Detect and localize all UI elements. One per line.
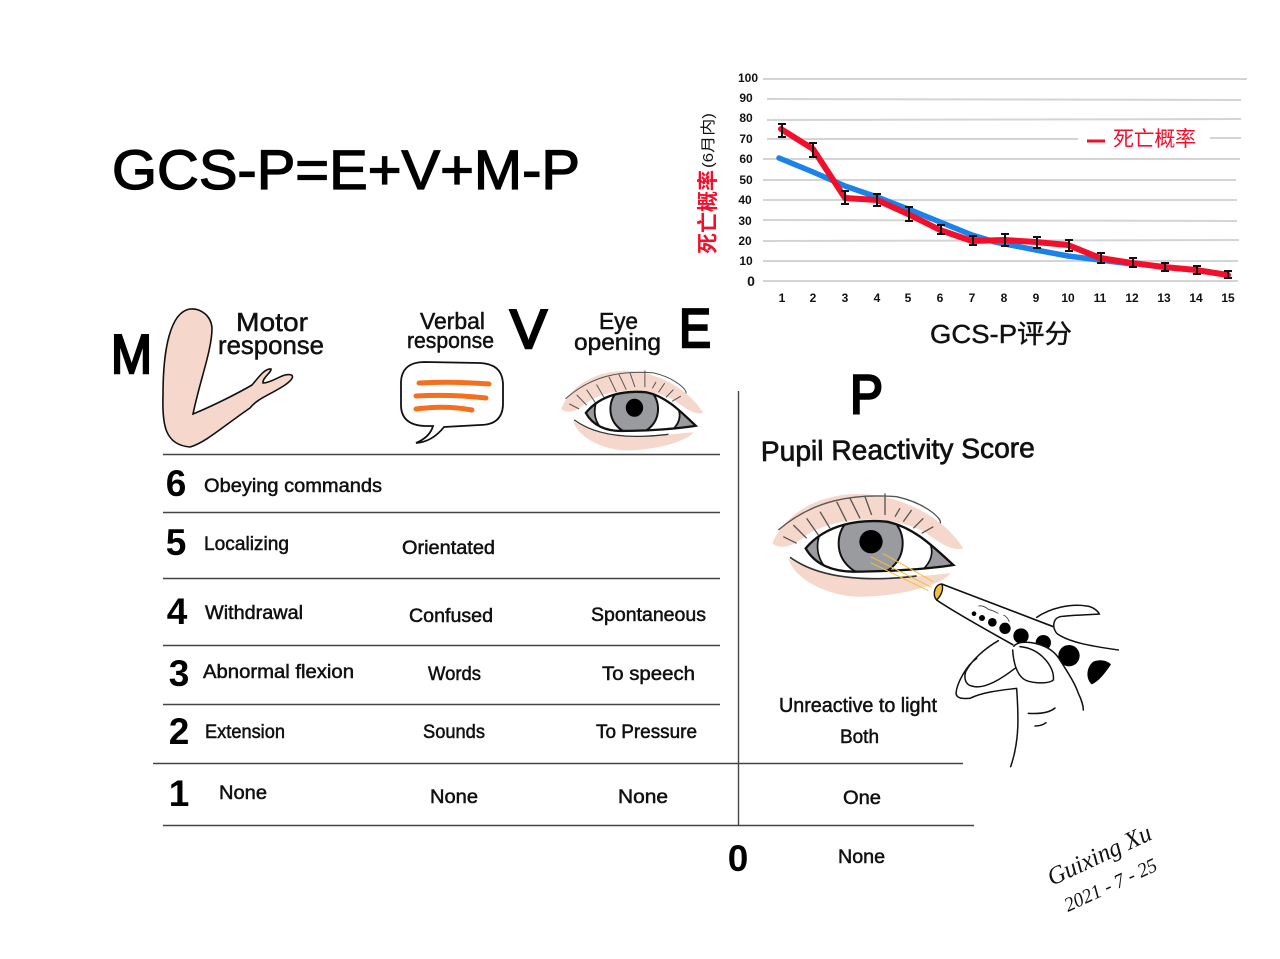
vertical divider	[738, 391, 740, 825]
icon: speech bubble	[401, 362, 503, 443]
row 3: To speech	[602, 664, 695, 685]
x axis tick labels: 12	[1125, 291, 1139, 305]
y axis title	[697, 113, 720, 254]
x axis tick labels: 4	[874, 291, 881, 305]
row 4: 4	[167, 591, 188, 632]
y axis tick labels: 50	[739, 173, 753, 187]
row 1: 1	[169, 773, 189, 814]
y axis tick labels: 70	[739, 132, 753, 146]
heading: verbal response	[407, 308, 494, 353]
y axis tick labels: 10	[739, 254, 753, 268]
y axis title: (6月内)	[700, 113, 717, 168]
row 2: To Pressure	[596, 722, 697, 743]
row 6: 6	[166, 463, 186, 504]
row 4: Confused	[409, 606, 493, 627]
row 1: One	[843, 788, 881, 809]
y axis tick labels: 30	[738, 214, 752, 228]
heading: eye opening: opening	[574, 329, 661, 355]
x axis tick labels: 3	[842, 291, 849, 305]
row 2: 2	[169, 711, 189, 752]
y axis tick labels: 20	[738, 234, 752, 248]
heading: eye opening	[574, 308, 661, 355]
letter P: P	[850, 363, 883, 425]
row 3	[169, 653, 695, 694]
heading: verbal response: Verbal	[420, 308, 485, 334]
x axis tick labels: 9	[1033, 291, 1040, 305]
line chart: mortality by GCS-P score	[697, 71, 1247, 349]
y axis tick labels	[738, 71, 758, 289]
y axis tick labels: 40	[738, 193, 752, 207]
row 0: 0	[728, 838, 748, 879]
row 1	[169, 773, 881, 814]
y axis tick labels: 80	[739, 111, 753, 125]
signature: Guixing Xu	[1043, 820, 1156, 891]
penlight	[934, 584, 1111, 684]
signature: 2021 - 7 - 25	[1061, 854, 1161, 917]
row 5: 5	[166, 522, 186, 563]
eye	[772, 493, 963, 597]
heading: eye opening: Eye	[599, 308, 638, 334]
icon: large eye with penlight and hand	[772, 493, 1118, 767]
x axis tick labels: 11	[1094, 291, 1107, 305]
error bars	[778, 124, 1232, 278]
heading: motor response: response	[218, 330, 324, 360]
x axis tick labels: 2	[810, 291, 817, 305]
y axis tick labels: 100	[738, 71, 758, 85]
row 5: Orientated	[402, 538, 495, 559]
table row lines	[153, 454, 974, 826]
x axis tick labels	[779, 291, 1235, 305]
x axis tick labels: 5	[905, 291, 912, 305]
light beams	[871, 553, 933, 591]
icon: small eye	[561, 370, 703, 450]
y axis tick labels: 90	[739, 91, 753, 105]
row 5	[166, 522, 495, 563]
heading: motor response	[218, 307, 324, 360]
red mortality line	[781, 129, 1228, 275]
heading: pupil reactivity score: Pupil Reactivity Score	[761, 432, 1035, 467]
row 6	[166, 463, 382, 504]
blue reference line	[779, 158, 1132, 264]
heading: verbal response: response	[407, 328, 494, 353]
letter M: M	[111, 323, 152, 385]
row 6: Obeying commands	[204, 476, 382, 497]
row 3: 3	[169, 653, 189, 694]
row 3: Abnormal flexion	[203, 662, 354, 683]
heading: motor response: Motor	[236, 307, 308, 337]
text: unreactive to light: Unreactive to light	[779, 695, 937, 717]
x axis tick labels: 7	[969, 291, 976, 305]
letter V: V	[510, 298, 547, 360]
x axis tick labels: 8	[1001, 291, 1008, 305]
hand	[956, 605, 1118, 767]
row 2	[169, 711, 697, 752]
text: both: Both	[840, 727, 879, 748]
row 2: Extension	[205, 722, 285, 743]
row 4	[167, 591, 706, 632]
row 1: None	[219, 783, 267, 804]
row 3: Words	[428, 664, 481, 685]
icon: arm	[163, 309, 292, 447]
x axis tick labels: 10	[1061, 291, 1075, 305]
row 2: Sounds	[423, 722, 485, 743]
row 0: None	[838, 847, 885, 868]
letter E: E	[679, 297, 711, 359]
title: GCS-P formula: GCS-P=E+V+M-P	[112, 138, 580, 201]
y axis title: 死亡概率	[697, 170, 720, 254]
x axis tick labels: 15	[1221, 291, 1235, 305]
x axis tick labels: 6	[937, 291, 944, 305]
row 4: Spontaneous	[591, 605, 706, 626]
row 5: Localizing	[204, 534, 289, 555]
legend: mortality: 死亡概率	[1113, 128, 1196, 151]
x axis title: GCS-P评分	[930, 319, 1072, 349]
x axis tick labels: 1	[779, 291, 786, 305]
row 0	[728, 838, 885, 879]
row 1: None	[430, 787, 478, 808]
row 1: None	[618, 787, 668, 808]
y axis tick labels: 60	[739, 152, 753, 166]
y axis tick labels: 0	[747, 273, 755, 289]
x axis tick labels: 14	[1189, 291, 1203, 305]
x axis tick labels: 13	[1157, 291, 1171, 305]
row 4: Withdrawal	[205, 603, 303, 624]
